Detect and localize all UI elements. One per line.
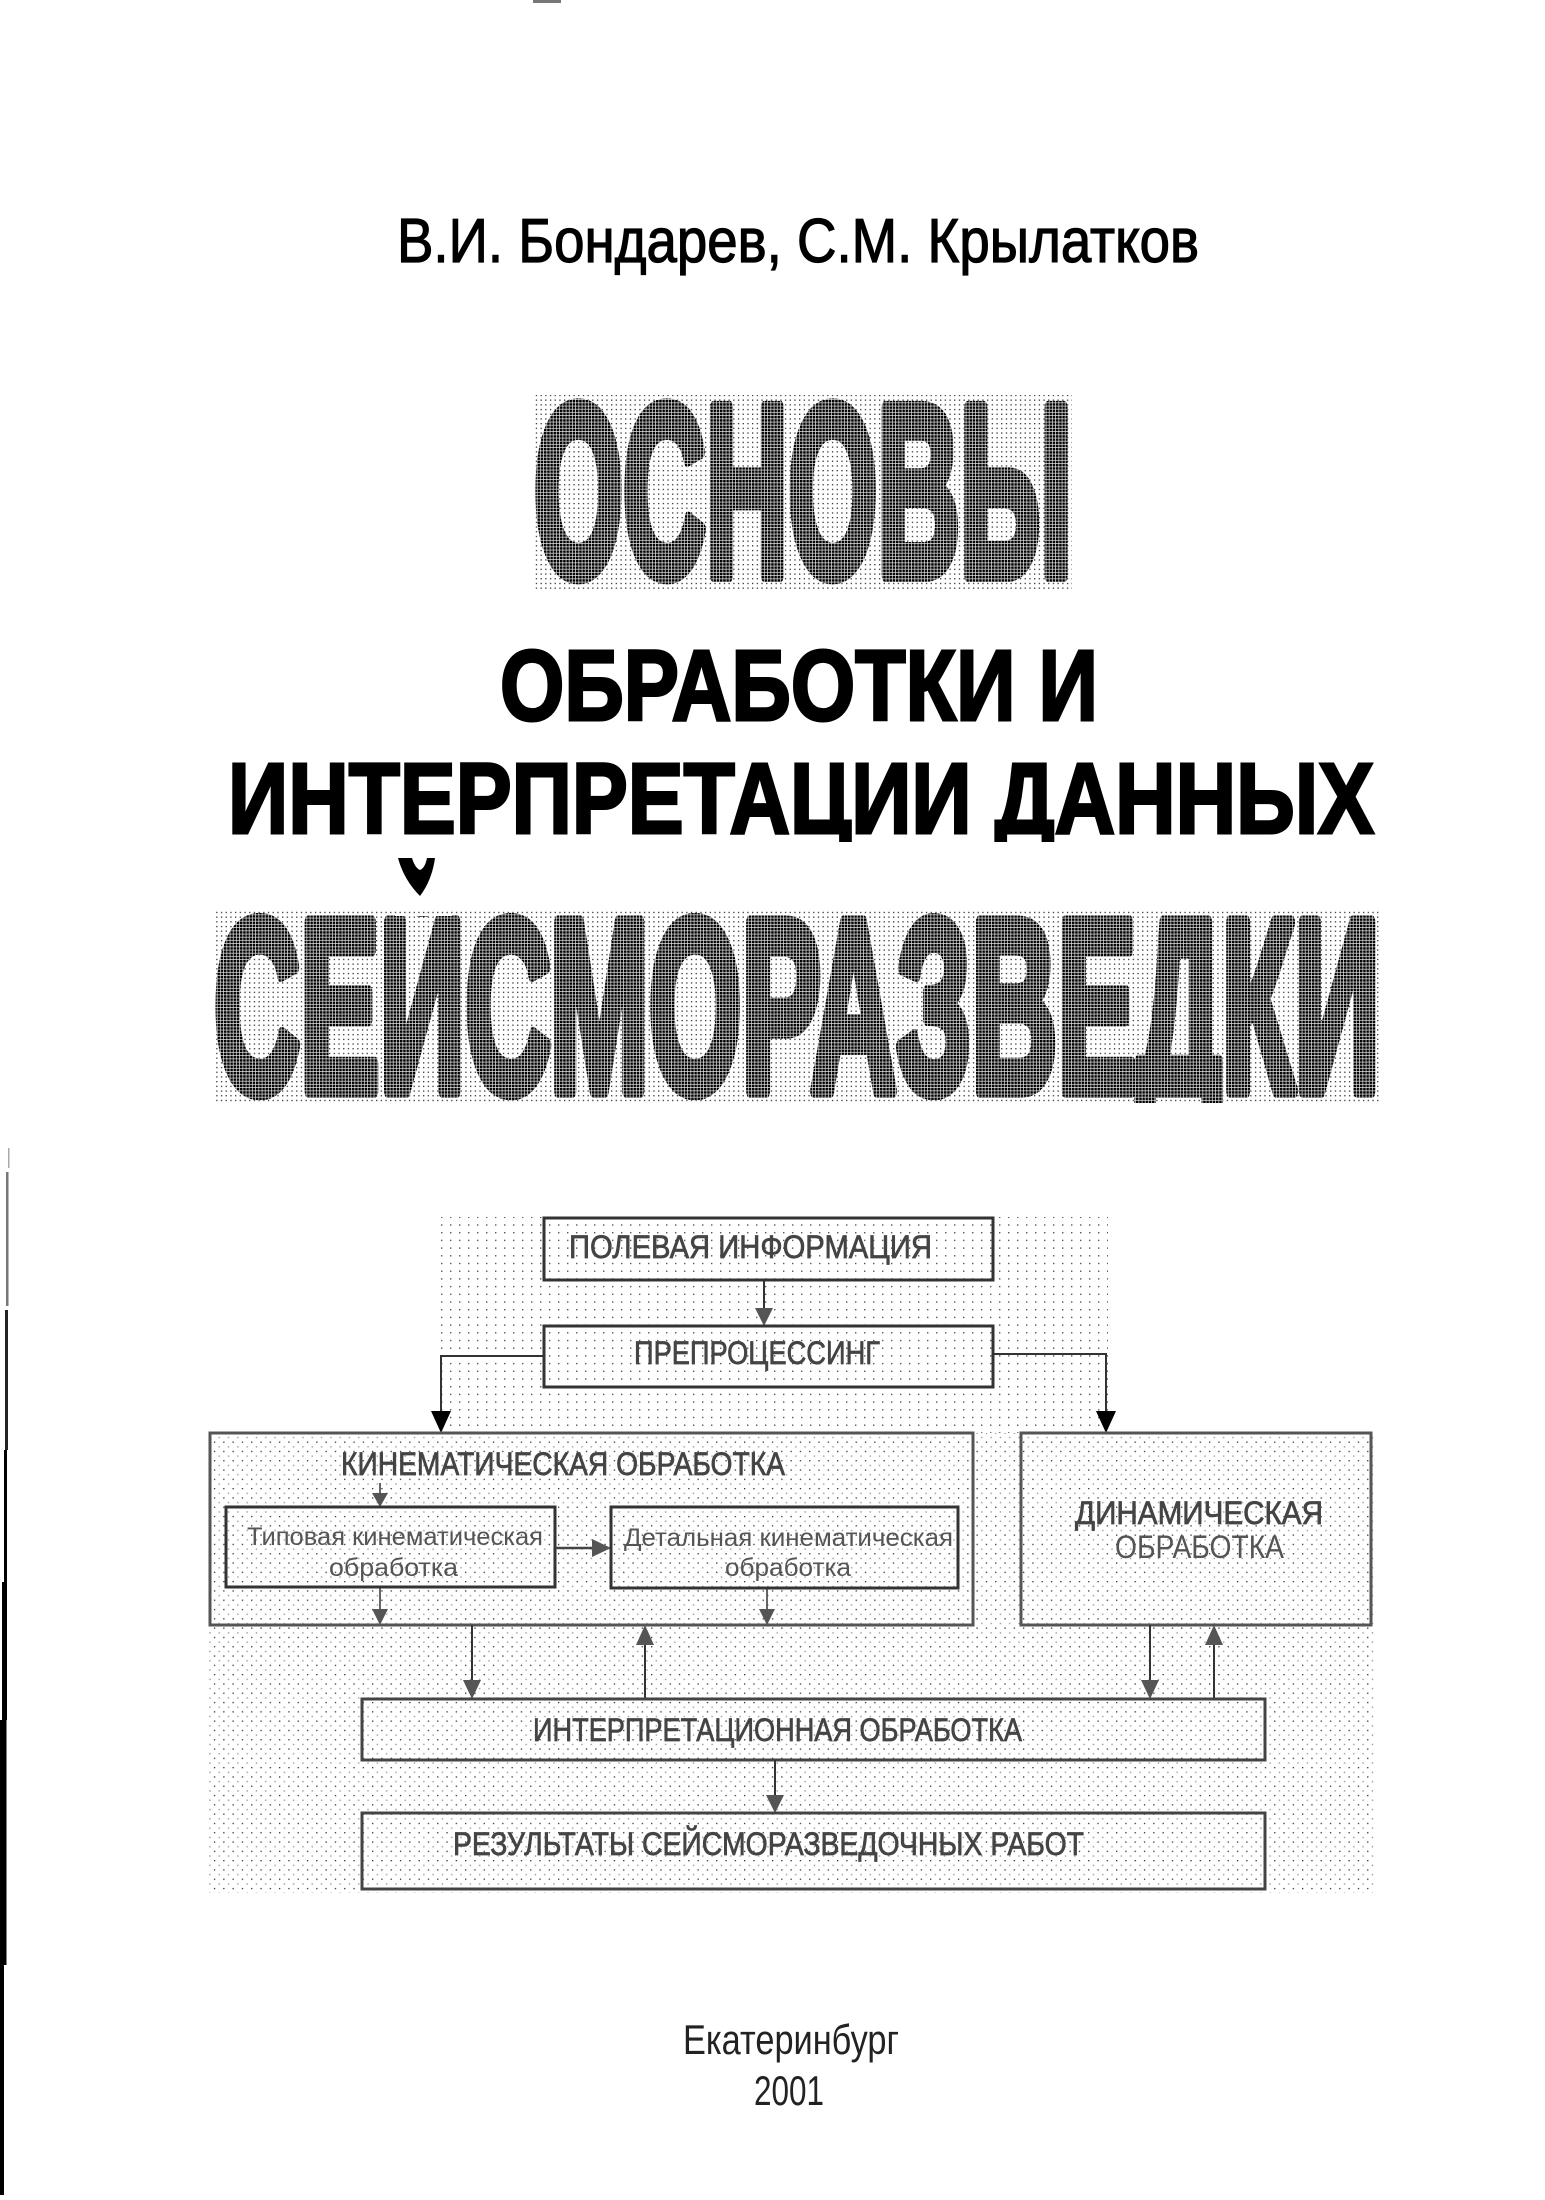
arrow: кинематическая to интерпретационная	[463, 1625, 481, 1699]
box: интерпретационная обработка: ИНТЕРПРЕТАЦИОННАЯ ОБРАБОТКА	[533, 1712, 1023, 1748]
panel: динамическая обработка	[1021, 1433, 1371, 1625]
breve mark of letter Й	[398, 858, 435, 896]
arrow: полевая to препроцессинг	[755, 1280, 773, 1326]
arrow: интерпретационная to кинематическая	[636, 1625, 654, 1699]
panel: динамическая обработка: ДИНАМИЧЕСКАЯ	[1075, 1495, 1323, 1531]
box: интерпретационная обработка	[362, 1699, 1265, 1760]
arrow: типовая to детальная	[555, 1539, 611, 1557]
box: типовая кинематическая обработка: Типовая кинематическая	[247, 1523, 543, 1551]
title: СЕЙСМОРАЗВЕДКИ	[216, 912, 1378, 1103]
panel: динамическая обработка: ОБРАБОТКА	[1115, 1529, 1285, 1565]
arrow: препроцессинг to динамическая	[993, 1354, 1116, 1433]
arrow: типовая down	[372, 1587, 388, 1625]
box: детальная кинематическая обработка	[611, 1507, 958, 1588]
box: типовая кинематическая обработка: обработка	[329, 1554, 458, 1582]
flow diagram	[207, 1217, 1374, 1893]
authors: В.И. Бондарев, С.М. Крылатков	[397, 207, 1199, 276]
box: результаты сейсморазведочных работ: РЕЗУЛЬТАТЫ СЕЙСМОРАЗВЕДОЧНЫХ РАБОТ	[453, 1826, 1084, 1862]
title: ОСНОВЫ	[535, 395, 1072, 589]
arrow: heading to типовая	[372, 1483, 388, 1507]
imprint: city: Екатеринбург	[683, 2016, 899, 2063]
box: детальная кинематическая обработка: Детальная кинематическая	[624, 1524, 953, 1552]
heading: кинематическая обработка: КИНЕМАТИЧЕСКАЯ ОБРАБОТКА	[341, 1446, 786, 1482]
diagram dotted background	[207, 1217, 1374, 1893]
imprint: year: 2001	[754, 2067, 824, 2114]
arrow: детальная down	[759, 1588, 775, 1625]
box: полевая информация: ПОЛЕВАЯ ИНФОРМАЦИЯ	[569, 1229, 932, 1265]
arrow: интерпретационная to динамическая	[1205, 1625, 1223, 1699]
scan mark at top	[533, 0, 561, 3]
scan edge: left black bar	[0, 1148, 10, 2195]
box: полевая информация	[544, 1218, 993, 1280]
arrow: динамическая to интерпретационная	[1141, 1625, 1159, 1699]
arrow: препроцессинг to кинематическая	[431, 1356, 544, 1433]
box: типовая кинематическая обработка	[226, 1507, 555, 1587]
arrow: интерпретационная to результаты	[766, 1760, 784, 1813]
box: результаты сейсморазведочных работ	[362, 1813, 1265, 1889]
box: детальная кинематическая обработка: обработка	[725, 1554, 851, 1582]
title: ОБРАБОТКИ И: ОБРАБОТКИ И	[500, 630, 1098, 742]
panel: кинематическая обработка	[210, 1433, 973, 1625]
box: препроцессинг	[544, 1326, 993, 1387]
box: препроцессинг: ПРЕПРОЦЕССИНГ	[634, 1335, 880, 1371]
